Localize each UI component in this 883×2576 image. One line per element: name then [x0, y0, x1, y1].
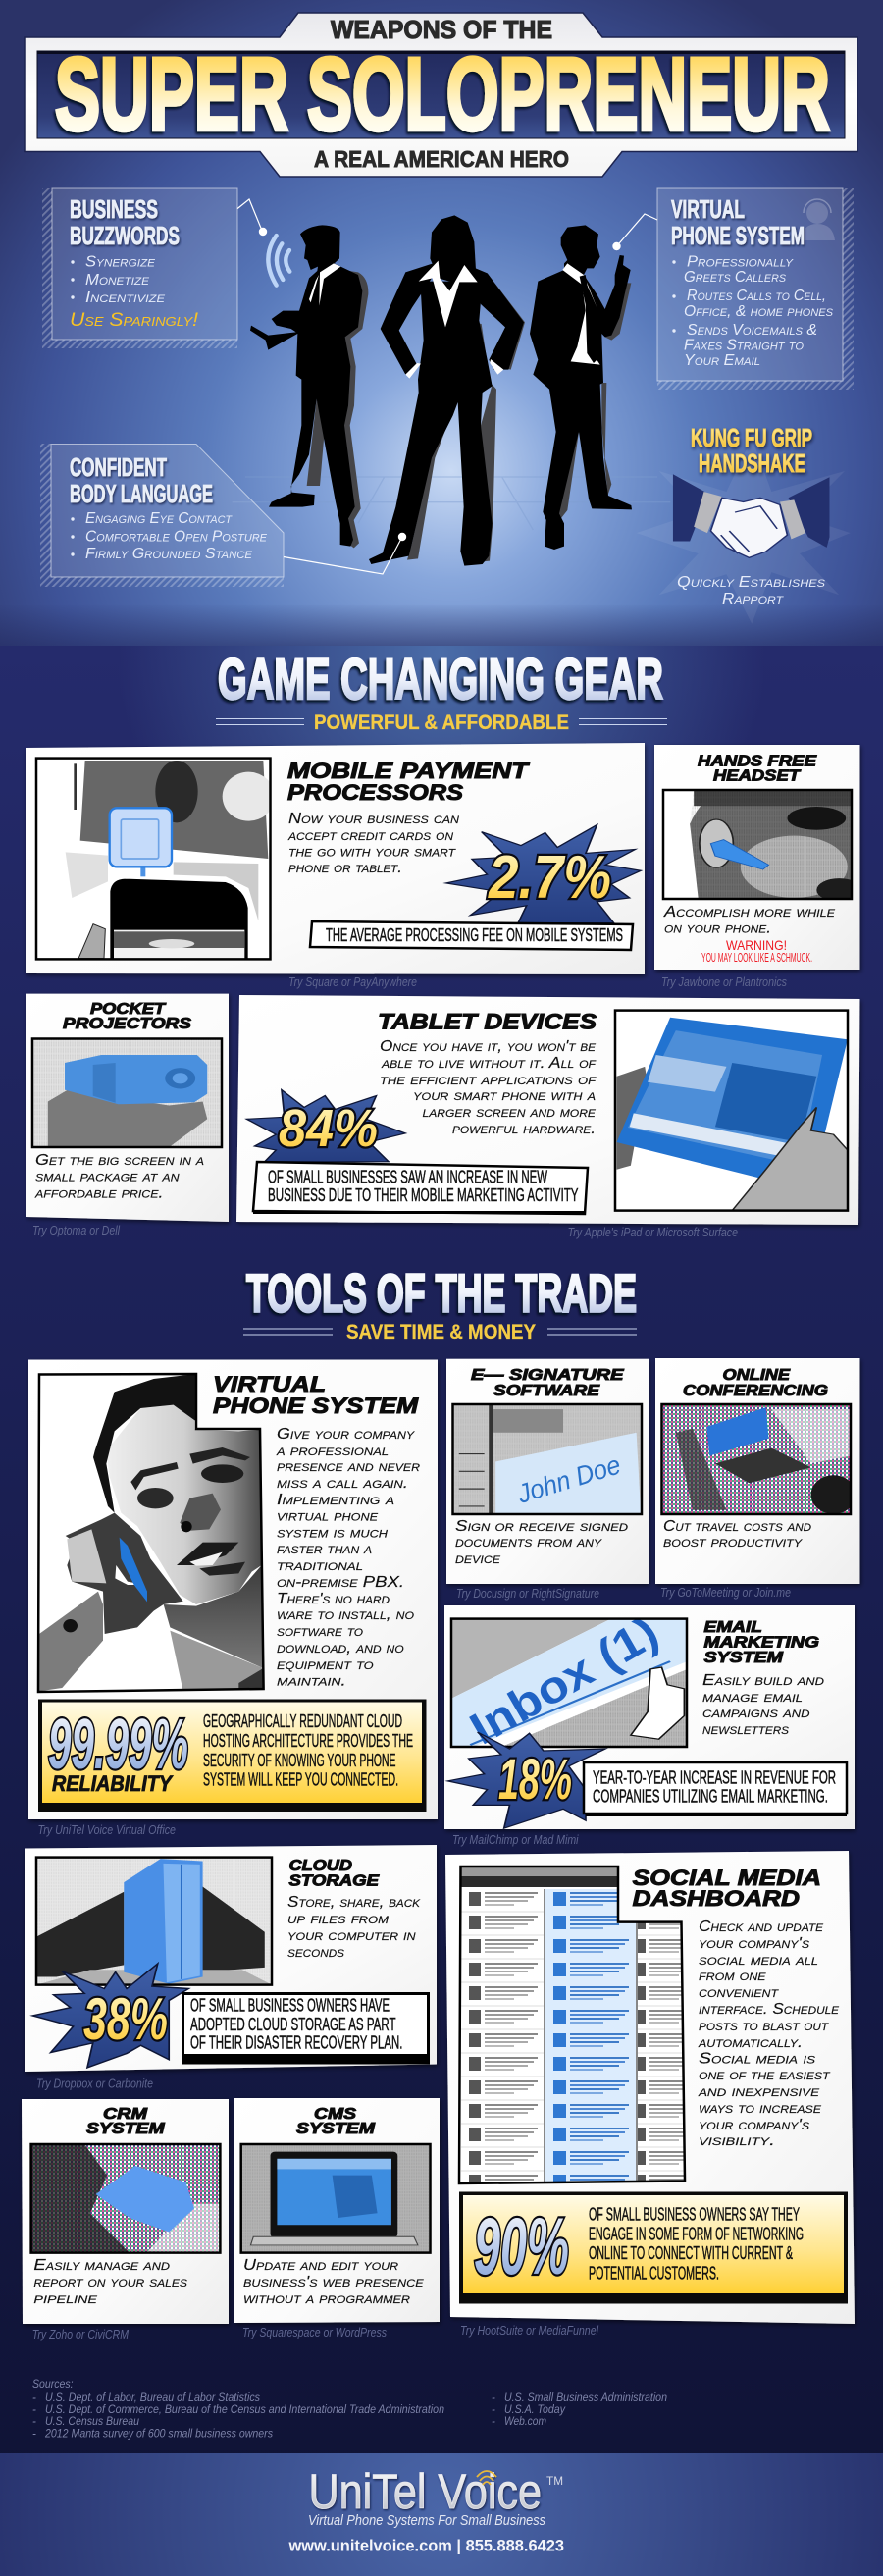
heading: MARKETING — [704, 1635, 819, 1651]
heading — [288, 1858, 381, 1890]
panel: virtual phone system — [657, 188, 854, 390]
sources list: - — [492, 2404, 495, 2416]
body text: posts to blast out — [699, 2018, 829, 2034]
source note: Try Zoho or CiviCRM — [32, 2328, 129, 2341]
list: Professionally — [687, 253, 794, 271]
body text: system is much — [277, 1525, 388, 1541]
heading: PHONE SYSTEM — [213, 1393, 419, 1418]
body text: your smart phone with a — [413, 1087, 596, 1104]
caption: Rapport — [722, 591, 784, 607]
heading: SOCIAL MEDIA — [633, 1866, 821, 1890]
source note: Try Jawbone or Plantronics — [661, 975, 787, 989]
caption: Quickly Establishes — [677, 574, 826, 591]
source note: Try Optoma or Dell — [32, 1224, 121, 1237]
subheading: POWERFUL & AFFORDABLE — [314, 711, 569, 734]
photo: card reader — [65, 761, 269, 958]
panel: e-signature software: John Doe — [513, 1449, 624, 1509]
panel: virtual phone system detail — [28, 1360, 438, 1819]
source note: Try MailChimp or Mad Mimi — [452, 1833, 580, 1847]
callout: 99.99% reliability: RELIABILITY — [52, 1771, 174, 1796]
heading: KUNG FU GRIP — [691, 423, 812, 452]
body text: Easily build and — [702, 1672, 824, 1689]
heading: CONFIDENT — [70, 452, 167, 482]
panel: confident body language — [40, 444, 284, 587]
callout: 99.99% reliability: HOSTING ARCHITECTURE PROVIDES THE — [203, 1731, 413, 1751]
body text: pipeline — [33, 2290, 98, 2307]
heading — [287, 759, 530, 805]
heading: EMAIL — [704, 1619, 762, 1636]
photo: man on phone — [37, 1372, 267, 1693]
heading: PROJECTORS — [63, 1016, 191, 1032]
photo: laptop with website — [241, 2144, 431, 2253]
callout: 90% networking: POTENTIAL CUSTOMERS. — [589, 2264, 719, 2284]
connector: body language to stance — [284, 533, 406, 574]
heading: SYSTEM — [86, 2121, 165, 2137]
body text: automatically. — [698, 2034, 803, 2051]
caption — [677, 574, 826, 607]
photo: laptop meeting halftone — [661, 1404, 856, 1514]
starburst stat: 18% — [447, 1732, 605, 1828]
heading: HANDS FREE — [698, 754, 818, 769]
body text: manage email — [702, 1689, 803, 1706]
body text: download, and no — [277, 1640, 404, 1656]
body text: one of the easiest — [699, 2067, 831, 2083]
list: Office, & home phones — [684, 303, 834, 320]
body text: on your phone. — [664, 920, 771, 936]
heading: BUZZWORDS — [70, 221, 180, 250]
body text — [287, 811, 459, 876]
body text — [698, 1919, 840, 2149]
photo: tablet in hands — [615, 1011, 848, 1211]
section heading: game changing gear: GAME CHANGING GEAR — [218, 648, 663, 711]
warning: WARNING! — [726, 937, 787, 953]
body text: miss a call again. — [277, 1475, 408, 1492]
body text: Update and edit your — [243, 2257, 398, 2274]
body text: affordable price. — [34, 1185, 164, 1202]
body text — [663, 1518, 811, 1551]
caption box — [584, 1762, 847, 1816]
heading: SYSTEM — [296, 2121, 376, 2137]
caption box: OF SMALL BUSINESSES SAW AN INCREASE IN NEW — [268, 1168, 547, 1187]
silhouette: man with earpiece — [530, 225, 632, 550]
body text: software to — [277, 1623, 363, 1640]
callout: 99.99% reliability: SECURITY OF KNOWING YOUR PHONE — [203, 1751, 396, 1770]
subtitle: A REAL AMERICAN HERO — [314, 146, 569, 172]
body text: Get the big screen in a — [35, 1152, 204, 1169]
sources list: U.S. Census Bureau — [45, 2416, 140, 2428]
list: Synergize — [85, 253, 156, 271]
heading — [633, 1866, 821, 1911]
section heading: tools of the trade: TOOLS OF THE TRADE — [246, 1262, 637, 1323]
body text: up files from — [287, 1911, 390, 1927]
body text: visibility. — [699, 2132, 775, 2149]
body text: Social media is — [699, 2051, 816, 2068]
body text: equipment to — [277, 1656, 374, 1673]
body text: small package at an — [35, 1168, 180, 1185]
body text — [33, 2257, 188, 2307]
source note: Try Dropbox or Carbonite — [36, 2077, 153, 2091]
heading — [704, 1619, 819, 1666]
tagline: Virtual Phone Systems For Small Business — [308, 2512, 545, 2529]
body text: Easily manage and — [33, 2257, 170, 2274]
body text: larger screen and more — [422, 1104, 597, 1121]
panel: business buzzwords — [42, 188, 237, 348]
starburst stat: 84% — [246, 1090, 405, 1162]
body text: on-premise PBX. — [277, 1574, 404, 1591]
silhouette: man with phone — [250, 225, 368, 548]
sources list: U.S. Small Business Administration — [504, 2392, 667, 2404]
body text: Accomplish more while — [663, 904, 836, 920]
panel: cms system — [234, 2098, 440, 2323]
heading: PROCESSORS — [287, 780, 463, 805]
body text: a professional — [276, 1443, 389, 1459]
heading: VIRTUAL — [671, 194, 745, 224]
sources list: - — [492, 2392, 495, 2404]
caption box — [253, 1162, 588, 1214]
body text: Store, share, back — [287, 1894, 421, 1911]
caption box: THE AVERAGE PROCESSING FEE ON MOBILE SYSTEMS — [326, 925, 623, 945]
heading: SOFTWARE — [493, 1383, 601, 1399]
body text: maintain. — [277, 1673, 346, 1690]
list: Comfortable Open Posture — [85, 528, 268, 546]
heading — [698, 754, 818, 785]
subheading — [243, 1321, 637, 1343]
page background — [0, 646, 883, 2576]
heading: PHONE SYSTEM — [671, 221, 805, 250]
section heading: tools of the trade — [243, 1262, 637, 1343]
section heading: game changing gear — [216, 648, 667, 734]
body text: your company's — [699, 1935, 810, 1952]
callout: kung fu grip handshake — [637, 423, 851, 624]
body text: social media all — [699, 1952, 818, 1969]
heading — [70, 452, 213, 508]
panel: crm system — [22, 2099, 229, 2324]
list — [672, 253, 834, 369]
heading — [691, 423, 812, 478]
icon: handshake — [637, 438, 851, 624]
photo: server room — [36, 1858, 272, 1985]
connector: virtual phone to earpiece — [613, 214, 657, 250]
source note: Try Squarespace or WordPress — [242, 2326, 387, 2339]
body text: Cut travel costs and — [663, 1518, 811, 1535]
source note: Try Docusign or RightSignature — [456, 1587, 599, 1601]
body text: virtual phone — [277, 1507, 379, 1525]
body text: presence and never — [277, 1458, 420, 1475]
body text: able to live without it. All of — [381, 1055, 597, 1072]
sources list: 2012 Manta survey of 600 small business owners — [44, 2428, 273, 2440]
sources list: - — [32, 2404, 36, 2416]
callout: 99.99% reliability: SYSTEM WILL KEEP YOU CONNECTED. — [203, 1770, 398, 1790]
sources list: - — [492, 2416, 495, 2428]
panel: online conferencing — [655, 1358, 859, 1584]
heading: DASHBOARD — [633, 1886, 800, 1911]
list: Greets Callers — [684, 269, 787, 286]
starburst stat: 38%: 38% — [83, 1986, 168, 2052]
list: Engaging Eye Contact — [85, 510, 233, 527]
body text: interface. Schedule — [699, 2001, 840, 2018]
photo: man with headset — [690, 791, 851, 898]
panel: hands free headset — [654, 745, 861, 970]
heading: MOBILE PAYMENT — [287, 759, 530, 783]
panel: social media dashboard — [445, 1851, 855, 2324]
body text: documents from any — [455, 1534, 602, 1551]
panel: e-signature software — [446, 1359, 649, 1584]
heading: STORAGE — [288, 1872, 381, 1890]
heading — [296, 2106, 376, 2137]
body text: and inexpensive — [698, 2083, 820, 2100]
caption box: BUSINESS DUE TO THEIR MOBILE MARKETING ACTIVITY — [268, 1185, 579, 1205]
heading: CRM — [103, 2106, 148, 2123]
body text: the efficient applications of — [380, 1072, 597, 1088]
body text: Once you have it, you won't be — [380, 1038, 597, 1055]
body text: business's web presence — [243, 2274, 424, 2290]
sources list: Web.com — [504, 2416, 546, 2428]
body text: convenient — [699, 1984, 779, 2001]
caption box: ADOPTED CLOUD STORAGE AS PART — [190, 2015, 396, 2034]
list: Routes Calls to Cell, — [687, 288, 826, 304]
body text — [34, 1152, 204, 1202]
caption box — [182, 1992, 430, 2065]
heading: CMS — [314, 2106, 356, 2123]
logo: TM — [546, 2474, 563, 2488]
sources list: - — [32, 2416, 36, 2428]
body text: accept credit cards on — [287, 827, 453, 844]
heading: SYSTEM — [704, 1650, 784, 1666]
source note: Try HootSuite or MediaFunnel — [460, 2324, 599, 2338]
body text: phone or tablet. — [288, 860, 402, 876]
callout: 99.99% reliability — [38, 1700, 426, 1812]
body text: Check and update — [699, 1919, 824, 1935]
panel: cloud storage — [25, 1845, 437, 2072]
heading: BODY LANGUAGE — [70, 479, 213, 508]
heading: CONFERENCING — [683, 1383, 828, 1399]
caption box — [310, 921, 633, 950]
starburst stat: 38% — [32, 1964, 188, 2068]
body text: Sign or receive signed — [455, 1518, 628, 1535]
heading: HEADSET — [713, 767, 801, 785]
callout: 90% networking — [459, 2192, 848, 2304]
body text — [663, 904, 836, 936]
body text: campaigns and — [702, 1705, 810, 1721]
title plate — [25, 13, 857, 177]
callout: 99.99% reliability: GEOGRAPHICALLY REDUNDANT CLOUD — [203, 1711, 402, 1731]
warning — [701, 937, 812, 965]
subheading — [216, 711, 667, 734]
body text: Give your company — [277, 1426, 415, 1443]
heading — [213, 1372, 419, 1418]
body text: boost productivity — [663, 1534, 803, 1551]
heading: POCKET — [90, 1001, 166, 1018]
body text: seconds — [287, 1944, 345, 1961]
body text — [380, 1038, 597, 1137]
heading — [86, 2106, 165, 2137]
sources list: - — [32, 2428, 36, 2440]
list: Firmly Grounded Stance — [85, 546, 253, 562]
sources list: Sources: — [32, 2379, 74, 2391]
heading — [683, 1367, 828, 1399]
photo: projector in hand — [32, 1038, 222, 1147]
heading — [70, 194, 180, 250]
body text: the go with your smart — [288, 844, 456, 861]
sources list — [32, 2379, 667, 2440]
footer — [0, 2453, 883, 2576]
subheading: SAVE TIME & MONEY — [346, 1321, 536, 1343]
icon: signal waves — [268, 236, 289, 286]
starburst stat: 18%: 18% — [498, 1748, 572, 1812]
photo: signed document — [452, 1404, 642, 1514]
caption box: OF THEIR DISASTER RECOVERY PLAN. — [190, 2033, 402, 2053]
callout: 99.99% reliability: 99.99% — [48, 1706, 188, 1784]
sources list: - — [32, 2392, 36, 2404]
floor grid lines — [233, 477, 670, 530]
heading: CLOUD — [288, 1858, 352, 1874]
body text: newsletters — [702, 1721, 790, 1738]
body text: Implementing a — [277, 1492, 394, 1508]
sources list: U.S. Dept. of Commerce, Bureau of the Census and International Trade Administration — [45, 2404, 444, 2416]
silhouette: woman — [369, 215, 525, 566]
body text: report on your sales — [33, 2274, 188, 2290]
body text — [276, 1426, 420, 1690]
source note: Try GoToMeeting or Join.me — [660, 1586, 791, 1600]
list — [70, 253, 199, 331]
body text: There's no hard — [277, 1591, 390, 1607]
body text: device — [455, 1551, 501, 1567]
photo: inbox closeup: Inbox (1) — [461, 1606, 667, 1755]
body text: from one — [699, 1968, 766, 1984]
body text: powerful hardware. — [452, 1121, 596, 1137]
source note: Try UniTel Voice Virtual Office — [37, 1823, 176, 1837]
body text — [243, 2257, 424, 2307]
body text: Now your business can — [288, 811, 459, 827]
body text — [287, 1894, 421, 1961]
list: Use Sparingly! — [70, 310, 199, 331]
list: Your Email — [684, 352, 760, 369]
body text: ways to increase — [699, 2100, 822, 2117]
callout: 90% networking: 90% — [474, 2202, 569, 2291]
list — [71, 510, 268, 562]
list: Monetize — [85, 272, 150, 289]
sources list: U.S.A. Today — [504, 2404, 566, 2416]
contact line: www.unitelvoice.com | 855.888.6423 — [288, 2536, 564, 2555]
heading: TABLET DEVICES — [378, 1010, 597, 1034]
body text: faster than a — [277, 1541, 372, 1557]
starburst stat: 84%: 84% — [279, 1099, 378, 1158]
panel: tablet devices — [236, 995, 859, 1225]
sources list: U.S. Dept. of Labor, Bureau of Labor Statistics — [45, 2392, 260, 2404]
starburst stat: 2.7% — [446, 825, 641, 923]
source note: Try Square or PayAnywhere — [288, 975, 417, 989]
body text: your computer in — [287, 1927, 416, 1944]
panel: mobile payment processors — [26, 743, 645, 974]
heading — [471, 1367, 625, 1399]
screenshot: dashboard — [459, 1866, 687, 2185]
heading — [671, 194, 805, 250]
list: Incentivize — [85, 289, 166, 306]
hero section — [0, 0, 883, 646]
heading: HANDSHAKE — [699, 448, 805, 478]
heading: VIRTUAL — [213, 1372, 326, 1396]
list: Sends Voicemails & — [687, 322, 817, 339]
body text — [702, 1672, 824, 1738]
panel: pocket projectors — [26, 994, 229, 1222]
body text: without a programmer — [243, 2290, 410, 2307]
heading — [63, 1001, 191, 1032]
icon: signal arcs — [477, 2471, 496, 2485]
logo: UniTel Voice — [308, 2464, 542, 2519]
body text: your company's — [699, 2117, 810, 2133]
icon: headset agent — [801, 199, 835, 240]
heading: ONLINE — [722, 1367, 791, 1384]
body text — [455, 1518, 628, 1567]
heading: E— SIGNATURE — [471, 1367, 625, 1384]
photo: handshake halftone — [31, 2144, 220, 2253]
caption box: OF SMALL BUSINESS OWNERS HAVE — [190, 1996, 390, 2016]
body text: ware to install, no — [277, 1606, 414, 1623]
panel: email marketing system — [444, 1605, 855, 1829]
title: weapons of the: WEAPONS OF THE — [331, 15, 552, 44]
body text: traditional — [277, 1557, 363, 1574]
connector: buzzwords to phone user — [237, 199, 267, 236]
heading: BUSINESS — [70, 194, 158, 224]
source note: Try Apple's iPad or Microsoft Surface — [568, 1226, 738, 1239]
starburst stat: 2.7%: 2.7% — [488, 844, 611, 912]
list: Faxes Straight to — [684, 338, 804, 354]
